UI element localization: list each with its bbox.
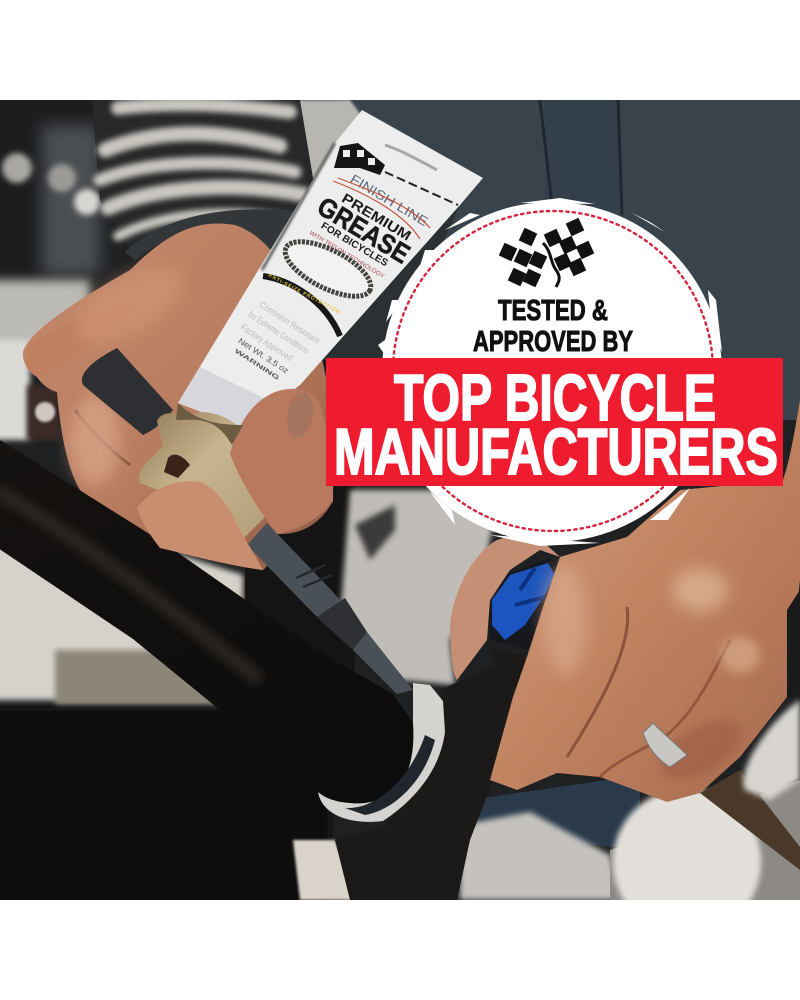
shirt and trousers [245,480,800,936]
thumbnail [286,392,314,438]
blurred workshop background [0,100,330,908]
tube label text: GREASE [312,191,415,269]
spoke key tool [82,348,413,694]
tube label text: FINISH LINE [348,171,431,229]
handlebar at right [700,590,800,870]
badge: torn white circle [378,198,722,546]
wedding ring [643,723,687,767]
black fork stanchion [0,437,413,803]
striped sleeve and collar [92,100,372,262]
foreground thumb over tube [230,389,333,534]
dark tube edge shadow [262,143,335,270]
icon: checkered flag [499,218,594,287]
heading: tested and approved by: APPROVED BY [473,326,633,358]
left hand [23,223,333,570]
tube nozzle collar [176,403,243,445]
heading: tested and approved by [473,295,633,358]
tube label text: FOR BICYCLES [319,221,390,269]
anti-seize band [263,272,341,336]
banner text [334,361,778,488]
dotted red ring [393,211,713,531]
denim jacket [320,100,800,420]
tube label text [233,171,431,382]
heading: tested and approved by: TESTED & [498,295,608,327]
anti-seize band: ANTI-SEIZE PROTECTION [267,272,341,315]
tube label text: WARNING [233,348,280,382]
tube label text: WITH TEFLON TECHNOLOGY [308,230,385,280]
tube hang hole [385,145,437,170]
tube label text: Net Wt. 3.5 oz [237,336,290,375]
red label lines [333,178,430,239]
tube label text: Factory Approved [239,322,295,363]
grease tube product [178,110,483,428]
foreground index finger [137,481,263,570]
blue suspension lever [489,558,554,650]
red banner [326,358,783,488]
fork crown and lower leg [318,650,525,900]
tube label text: Corrosion Resistant [258,299,322,346]
chain loop illustration [282,239,374,299]
tube label text: for Extreme Conditions [247,309,311,356]
tube checkered flag mark [334,143,458,205]
tube label text: PREMIUM [339,190,414,244]
right hand [450,400,800,802]
